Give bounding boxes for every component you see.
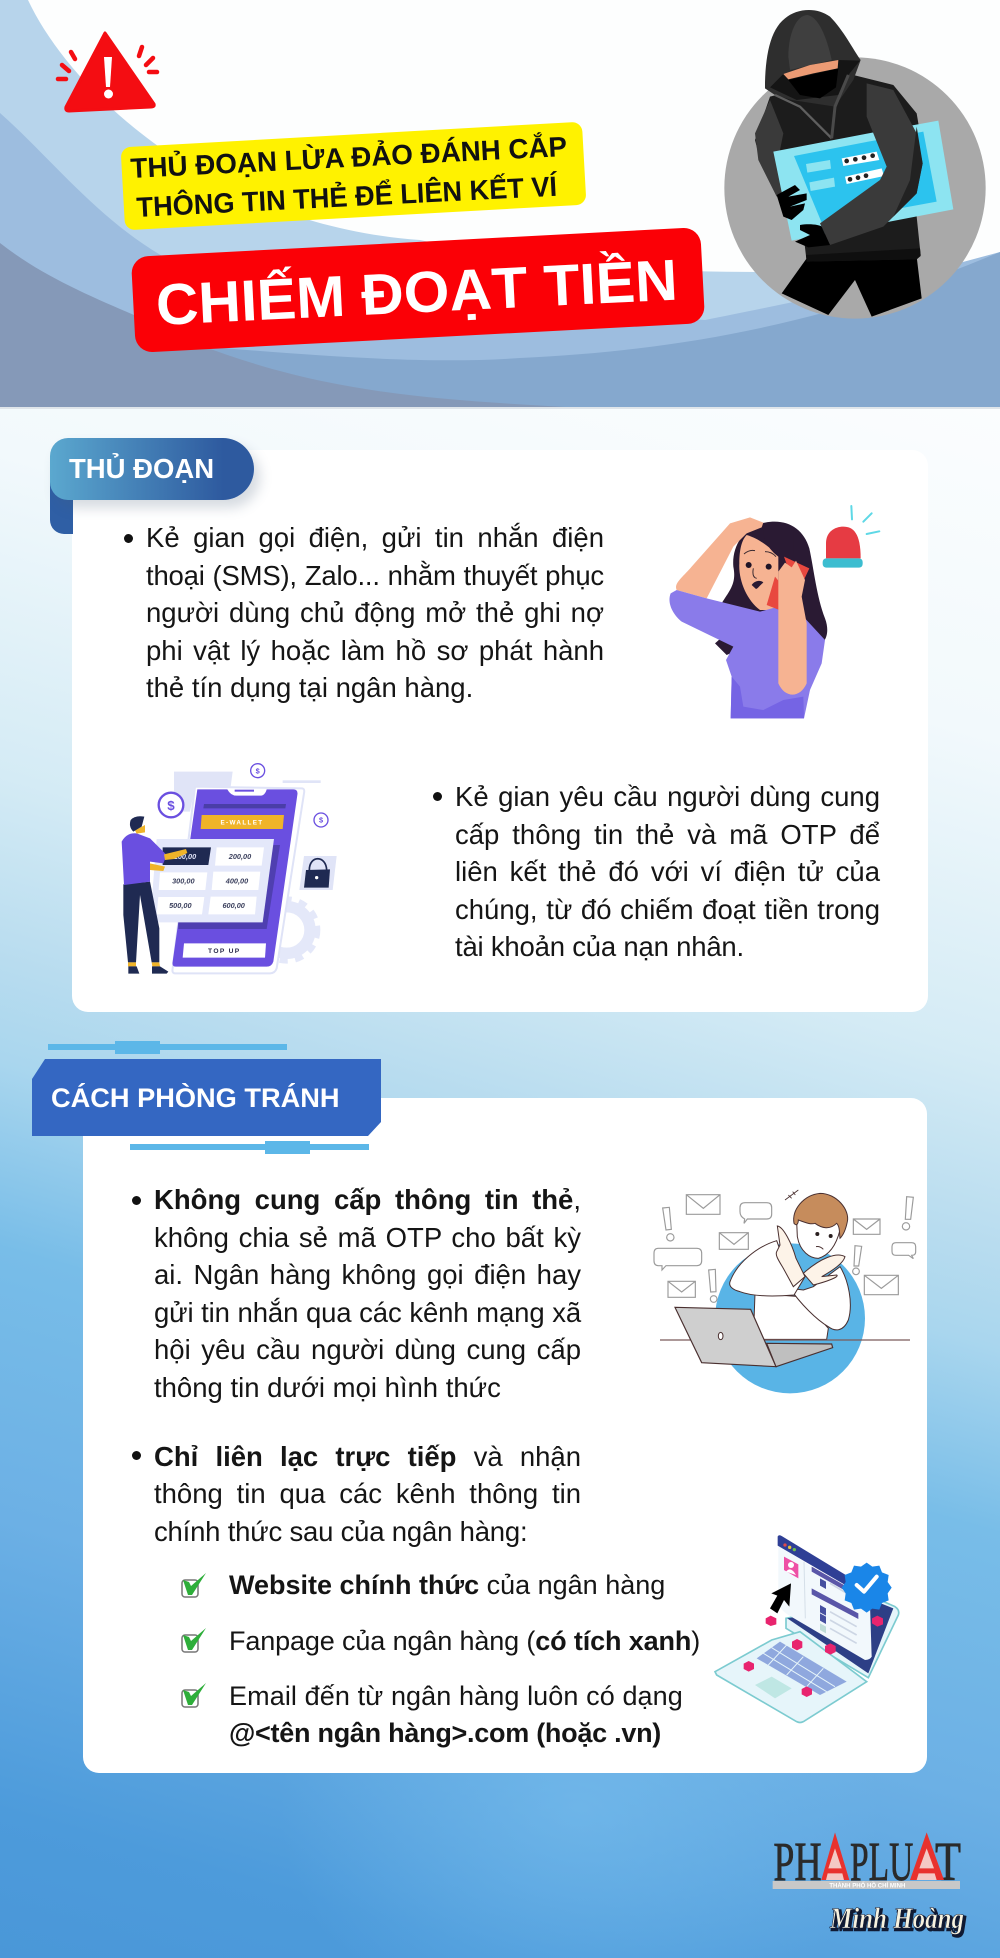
illustration: worried woman on phone with siren bbox=[670, 505, 880, 718]
text block: do not share card info: thông tin dưới mọi hình thức bbox=[154, 1372, 501, 1402]
decoration bar below heading bbox=[130, 1141, 369, 1154]
illustration: man topping up e-wallet on phone bbox=[122, 763, 336, 974]
illustration: man topping up e-wallet on phone: $ bbox=[256, 766, 260, 775]
text block: first scam step bbox=[146, 522, 604, 703]
heading: cách phòng tránh: CÁCH PHÒNG TRÁNH bbox=[51, 1082, 339, 1113]
title: yellow banner bbox=[121, 122, 586, 230]
illustration: man topping up e-wallet on phone: 200,00 bbox=[228, 852, 251, 861]
text block: contact official channels: Chỉ liên lạc trực tiếp và nhận bbox=[154, 1440, 581, 1472]
illustration: man topping up e-wallet on phone: 400,00 bbox=[225, 876, 248, 885]
text block: first scam step: phi vật lý hoặc làm hồ sơ phát hành bbox=[146, 634, 604, 666]
title: yellow banner: THÔNG TIN THẺ ĐỂ LIÊN KẾT VÍ bbox=[136, 170, 559, 223]
illustration: man topping up e-wallet on phone: E-WALLET bbox=[220, 819, 264, 826]
logo: Pháp Luật: T bbox=[935, 1831, 961, 1892]
illustration: man topping up e-wallet on phone: 600,00 bbox=[222, 901, 245, 910]
icon: check mark bbox=[181, 1573, 206, 1598]
text block: do not share card info: gửi tin nhắn qua các kênh mạng xã bbox=[154, 1296, 581, 1328]
header banner background bbox=[0, 0, 1000, 409]
author signature: Minh Hoàng bbox=[831, 1904, 966, 1937]
bullet bbox=[433, 792, 442, 801]
icon: check mark bbox=[181, 1628, 206, 1653]
text block: first scam step: người dùng chủ động mở thẻ ghi nợ bbox=[146, 597, 604, 628]
text block: do not share card info: hội yêu cầu người dùng cung cấp bbox=[154, 1334, 581, 1365]
text block: second scam step bbox=[455, 781, 880, 962]
text block: first scam step: thoại (SMS), Zalo... nhằm thuyết phục bbox=[146, 560, 604, 590]
bullet bbox=[132, 1196, 141, 1205]
text block: first scam step: thẻ tín dụng tại ngân hàng. bbox=[146, 672, 473, 703]
logo: Pháp Luật: PLU bbox=[850, 1831, 913, 1892]
icon: check mark bbox=[181, 1683, 206, 1708]
text block: contact official channels: chính thức sau của ngân hàng: bbox=[154, 1516, 527, 1546]
list item: email bbox=[229, 1680, 683, 1748]
heading: thủ đoạn ribbon: THỦ ĐOẠN bbox=[69, 453, 214, 484]
logo: Pháp Luật: PH bbox=[773, 1831, 822, 1892]
text block: contact official channels: thông tin qua các kênh thông tin bbox=[154, 1478, 581, 1509]
illustration: man topping up e-wallet on phone: TOP UP bbox=[208, 948, 241, 955]
icon: red warning triangle bbox=[56, 31, 160, 112]
illustration: man topping up e-wallet on phone: $ bbox=[167, 798, 175, 813]
logo: Pháp Luật bbox=[772, 1831, 961, 1892]
text block: do not share card info: không chia sẻ mã OTP cho bất kỳ bbox=[154, 1222, 581, 1252]
text block: second scam step: liên kết thẻ đó với ví điện tử của bbox=[455, 856, 880, 887]
text block: first scam step: Kẻ gian gọi điện, gửi tin nhắn điện bbox=[146, 522, 604, 553]
title: red banner bbox=[132, 228, 704, 352]
text block: second scam step: chúng, từ đó chiếm đoạt tiền trong bbox=[455, 894, 880, 924]
illustration: man topping up e-wallet on phone: 300,00 bbox=[172, 876, 195, 885]
text block: do not share card info: Không cung cấp thông tin thẻ, bbox=[154, 1184, 581, 1215]
bullet bbox=[132, 1451, 141, 1460]
illustration: man topping up e-wallet on phone: $ bbox=[319, 816, 323, 825]
decoration bar above heading bbox=[48, 1041, 287, 1054]
logo: Pháp Luật: THÀNH PHỐ HỒ CHÍ MINH bbox=[829, 1881, 905, 1889]
bullet bbox=[124, 534, 133, 543]
text block: do not share card info bbox=[154, 1184, 582, 1403]
title: red banner: CHIẾM ĐOẠT TIỀN bbox=[154, 248, 679, 338]
illustration: man topping up e-wallet on phone: 500,00 bbox=[169, 901, 192, 910]
list item: email: Email đến từ ngân hàng luôn có dạng bbox=[229, 1680, 683, 1710]
text block: second scam step: tài khoản của nạn nhân. bbox=[455, 931, 744, 962]
list item: website: Website chính thức của ngân hàng bbox=[229, 1570, 665, 1600]
text block: second scam step: Kẻ gian yêu cầu người dùng cung bbox=[455, 781, 880, 812]
text block: second scam step: cấp thông tin thẻ và mã OTP để bbox=[455, 818, 880, 850]
author signature: Minh Hoàng bbox=[829, 1902, 964, 1935]
list item: email: @<tên ngân hàng>.com (hoặc .vn) bbox=[229, 1718, 661, 1748]
list item: fanpage: Fanpage của ngân hàng (có tích xanh) bbox=[229, 1626, 700, 1656]
illustration: isometric laptop with verified badge bbox=[714, 1535, 900, 1724]
page background gradient bbox=[0, 408, 1000, 1958]
heading: thủ đoạn ribbon bbox=[50, 438, 264, 534]
illustration: man topping up e-wallet on phone: 100,00 bbox=[174, 852, 196, 861]
text block: do not share card info: ai. Ngân hàng không gọi điện hay bbox=[154, 1259, 581, 1290]
panel: thủ đoạn card bbox=[72, 450, 928, 1012]
illustration: man refusing with crossed arms at laptop bbox=[653, 1190, 916, 1394]
panel: cách phòng tránh card bbox=[83, 1098, 927, 1773]
text block: contact official channels bbox=[154, 1440, 581, 1547]
title: yellow banner: THỦ ĐOẠN LỪA ĐẢO ĐÁNH CẮP bbox=[130, 130, 568, 184]
heading: cách phòng tránh bbox=[32, 1059, 381, 1136]
illustration: hooded thief holding card bbox=[724, 10, 986, 319]
